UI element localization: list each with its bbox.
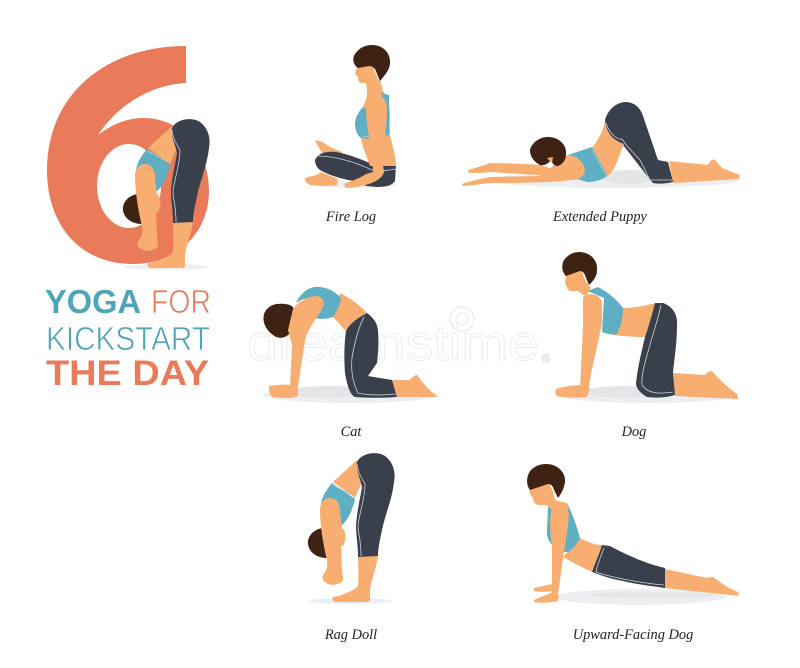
label: Cat: Cat	[341, 424, 362, 440]
figure: Upward-Facing Dog	[527, 464, 739, 605]
title	[45, 283, 211, 393]
label: Extended Puppy: Extended Puppy	[552, 209, 648, 225]
title line: YOGA FOR: YOGA	[45, 283, 141, 320]
label: Fire Log: Fire Log	[325, 209, 376, 225]
figure: Cat	[263, 287, 438, 403]
label: Upward-Facing Dog: Upward-Facing Dog	[573, 627, 693, 643]
title word: FOR: FOR	[151, 283, 211, 320]
figure: Fire Log	[305, 45, 397, 188]
title line: THE DAY: THE DAY	[46, 354, 209, 393]
figure: Dog	[555, 252, 738, 403]
figure: Extended Puppy	[462, 102, 740, 188]
title line: KICKSTART: KICKSTART	[46, 320, 210, 357]
figure: forward fold over the 6	[123, 119, 210, 270]
figure: Rag Doll	[308, 453, 395, 604]
label: Dog: Dog	[621, 424, 646, 440]
watermark: dreamstime	[247, 315, 539, 371]
big number 6	[47, 46, 209, 264]
label: Rag Doll: Rag Doll	[324, 627, 377, 643]
